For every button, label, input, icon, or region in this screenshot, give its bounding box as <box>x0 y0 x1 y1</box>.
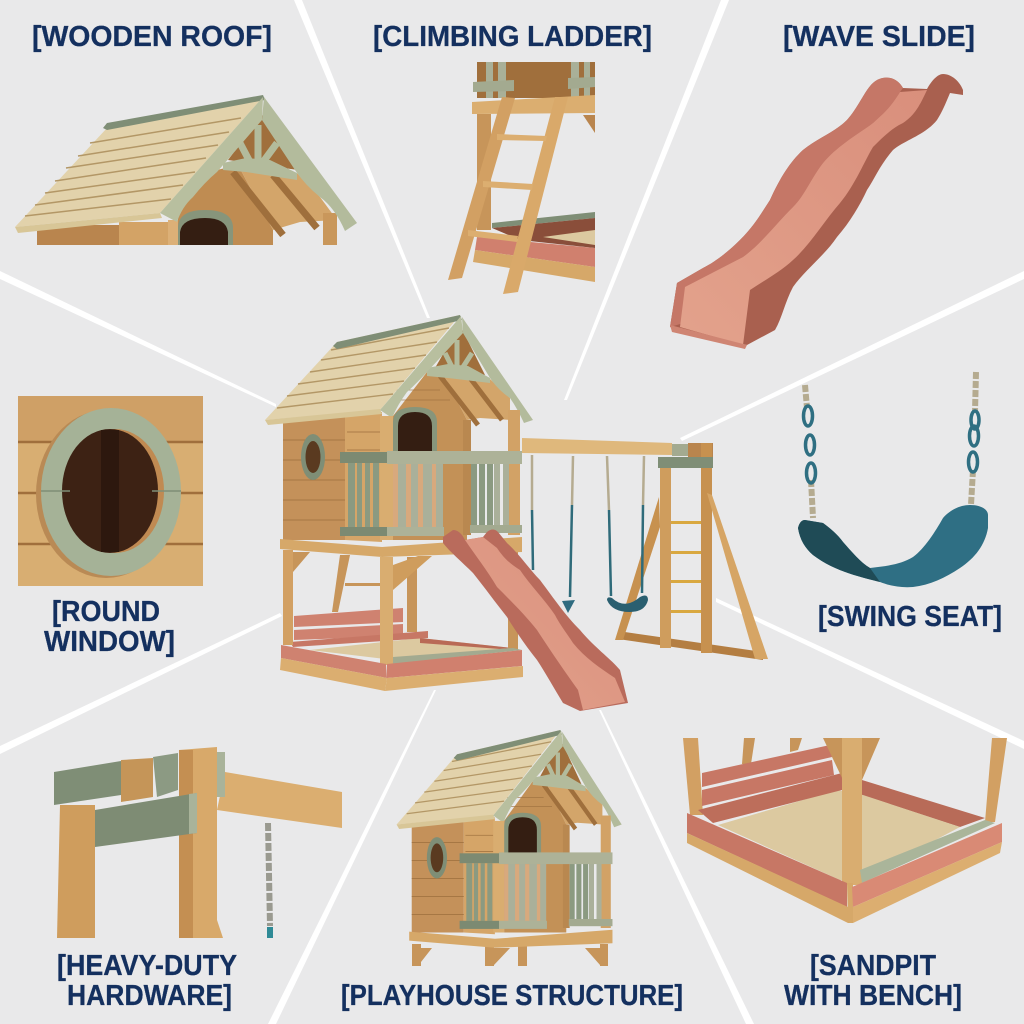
illustration: climbing ladder <box>448 62 595 294</box>
illustration: hardware <box>54 747 342 938</box>
illustration: round window <box>18 396 203 586</box>
heading: wave slide: [WAVE SLIDE] <box>783 21 975 53</box>
illustration: swing seat <box>798 372 988 587</box>
panel: round window <box>18 396 203 658</box>
heading: sandpit: WITH BENCH] <box>784 980 962 1012</box>
panel: wave slide <box>670 21 975 349</box>
playhouse <box>265 315 533 557</box>
panel: swing seat <box>798 372 1002 633</box>
slide <box>443 530 628 711</box>
heading: swing seat: [SWING SEAT] <box>818 601 1002 633</box>
illustration: sandpit <box>683 738 1007 923</box>
heading: hardware <box>57 950 237 1012</box>
heading: round window: WINDOW] <box>44 626 175 658</box>
heading: playhouse structure: [PLAYHOUSE STRUCTURE] <box>341 980 683 1012</box>
panel: sandpit with bench <box>683 738 1007 1012</box>
central playset illustration <box>265 315 768 711</box>
heading: hardware: HARDWARE] <box>67 980 232 1012</box>
heading: round window: [ROUND <box>52 596 160 628</box>
heading: wooden roof: [WOODEN ROOF] <box>32 21 272 53</box>
illustration: wooden roof <box>15 95 357 245</box>
illustration: wave slide <box>670 74 963 349</box>
heading: hardware: [HEAVY-DUTY <box>57 950 237 982</box>
heading: climbing ladder: [CLIMBING LADDER] <box>373 21 652 53</box>
panel: wooden roof <box>15 21 357 245</box>
swing frame <box>522 438 768 660</box>
illustration: small playhouse <box>397 730 622 966</box>
panel: playhouse structure <box>341 730 683 1012</box>
sandpit and legs <box>280 545 523 691</box>
heading: sandpit <box>784 950 962 1012</box>
swing chains and seats <box>532 455 648 613</box>
panel: climbing ladder <box>373 21 652 294</box>
heading: sandpit: [SANDPIT <box>810 950 936 982</box>
heading: round window <box>44 596 175 658</box>
panel: heavy-duty hardware <box>54 747 342 1012</box>
